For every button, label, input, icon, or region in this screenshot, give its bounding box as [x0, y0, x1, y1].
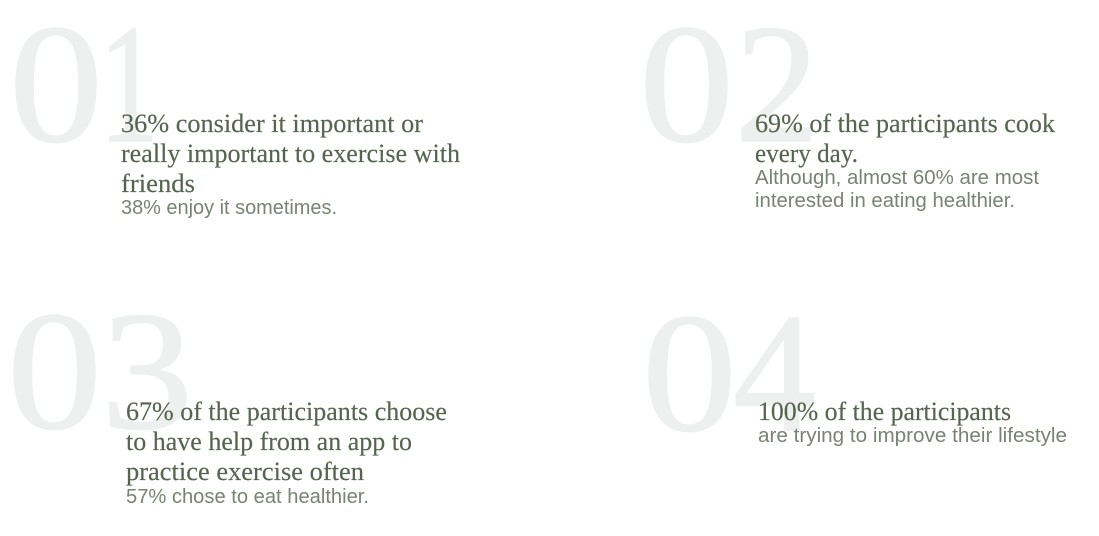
heading: cooking every day: 69% of the participants cook	[755, 109, 1055, 138]
panel: finding 02	[639, 0, 1055, 212]
panel: finding 01	[9, 0, 460, 219]
heading: app help for exercise: 67% of the participants choose	[126, 397, 447, 426]
heading: app help for exercise: to have help from an app to	[126, 427, 412, 456]
heading: app help for exercise	[126, 397, 447, 486]
supporting text 02: Although, almost 60% are most	[755, 167, 1039, 189]
heading: cooking every day	[755, 109, 1055, 168]
supporting text 02	[755, 167, 1039, 212]
heading: app help for exercise: practice exercise often	[126, 457, 364, 486]
large number 03: 3	[101, 277, 193, 465]
heading: exercise with friends	[121, 109, 460, 198]
supporting text 02: interested in eating healthier.	[755, 190, 1015, 212]
supporting text 03: 57% chose to eat healthier.	[126, 486, 369, 508]
large number 02	[639, 0, 819, 178]
large number 03	[7, 277, 193, 465]
panel: finding 04	[642, 279, 1067, 467]
large number 01	[9, 0, 159, 178]
heading: exercise with friends: 36% consider it important or	[121, 109, 423, 138]
heading: cooking every day: every day.	[755, 139, 858, 168]
heading: exercise with friends: really important to exercise with	[121, 139, 460, 168]
heading: all participants: 100% of the participants	[758, 397, 1011, 426]
panel: finding 03	[7, 277, 447, 508]
large number 04	[642, 279, 816, 467]
supporting text 04: are trying to improve their lifestyle	[758, 425, 1067, 447]
large number 04: 0	[642, 279, 737, 467]
large number 03: 0	[7, 277, 102, 465]
large number 04: 4	[733, 279, 816, 467]
heading: exercise with friends: friends	[121, 169, 195, 198]
supporting text 01: 38% enjoy it sometimes.	[121, 197, 337, 219]
